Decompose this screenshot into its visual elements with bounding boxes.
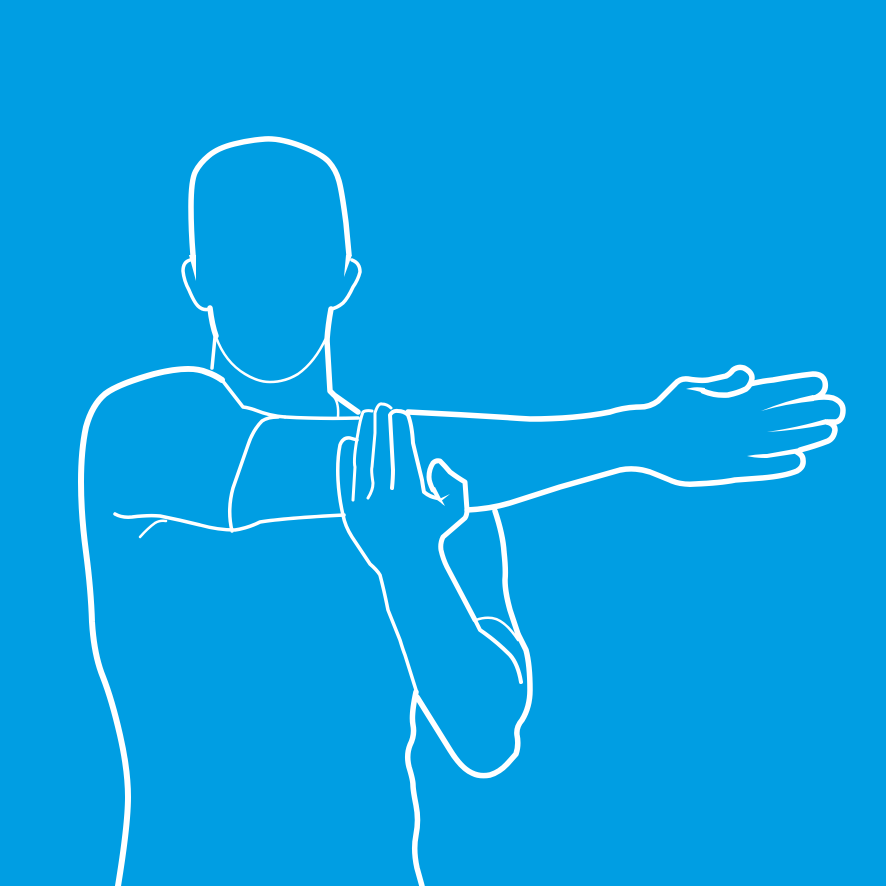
extended hand fingers	[747, 374, 843, 458]
forearm crease	[475, 620, 521, 682]
collar line	[222, 380, 285, 417]
figure: head and neck	[183, 139, 360, 417]
left ear	[183, 260, 210, 310]
jaw	[210, 308, 216, 336]
thumb crease	[431, 487, 445, 506]
middle finger	[813, 397, 843, 422]
wrist lower edge	[343, 515, 416, 690]
right hair tip	[344, 255, 352, 277]
neck right and collar	[327, 340, 358, 412]
index finger	[750, 374, 825, 397]
arm bottom edge	[467, 452, 803, 510]
arm top edge	[408, 367, 752, 419]
back line behind forearm	[495, 511, 518, 634]
ring finger taper	[747, 448, 800, 458]
gripping hand	[338, 404, 475, 690]
sleeve edge	[230, 417, 278, 531]
figure: torso and shoulder	[81, 369, 518, 886]
middle finger	[368, 404, 391, 498]
bent elbow	[417, 618, 530, 776]
upper arm bottom	[115, 514, 344, 530]
index finger and thumb side	[390, 411, 437, 498]
shoulder and left side	[81, 369, 222, 886]
sleeve crease	[140, 521, 166, 537]
right ear	[331, 260, 360, 309]
ring finger	[800, 422, 835, 450]
head outline	[191, 139, 349, 255]
elbow outline	[417, 634, 530, 776]
thin crease	[476, 618, 518, 640]
index finger taper	[761, 395, 814, 411]
ring finger	[353, 411, 372, 500]
thumb	[429, 461, 475, 620]
left hair tip	[189, 255, 196, 281]
little finger	[338, 438, 357, 515]
right side of torso	[408, 692, 422, 886]
upper arm top across chest	[285, 417, 358, 418]
middle finger taper	[767, 419, 828, 432]
thumb taper	[686, 387, 705, 393]
neck left	[212, 337, 215, 368]
stretched arm	[115, 367, 803, 537]
